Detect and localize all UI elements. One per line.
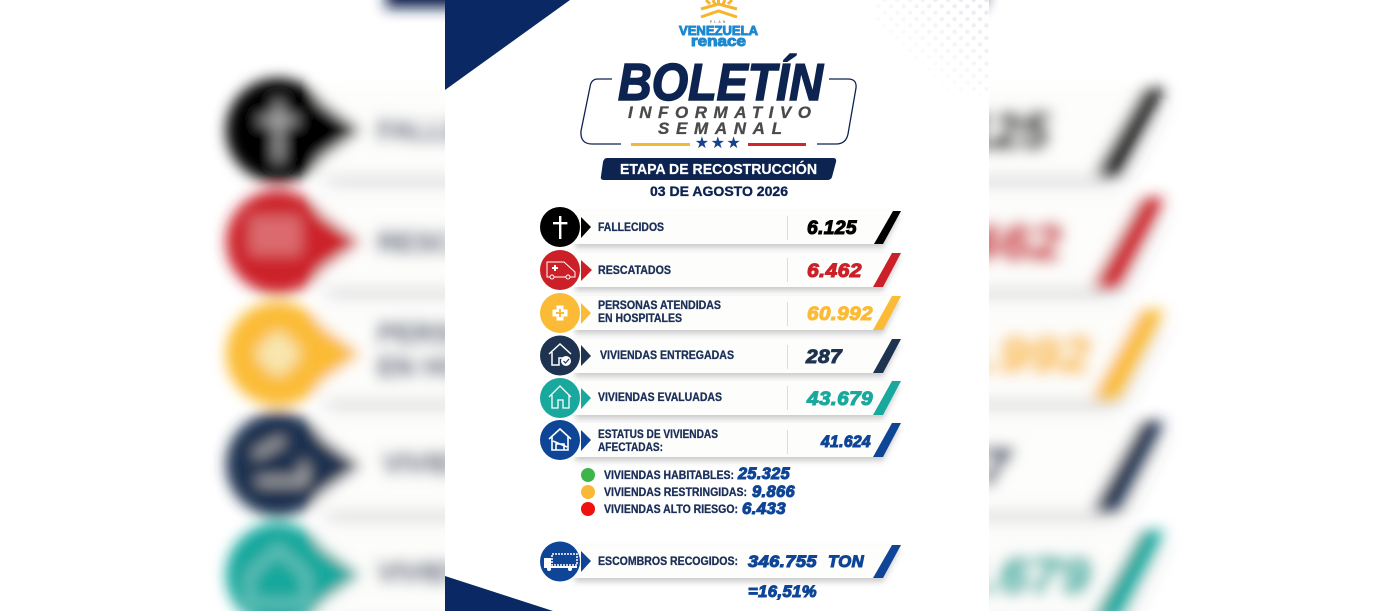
infographic canvas — [214, 0, 1174, 611]
row: Viviendas entregadas: 287 — [805, 346, 843, 368]
row: Viviendas evaluadas — [540, 378, 901, 418]
row: Viviendas evaluadas: VIVIENDAS EVALUADAS — [598, 392, 722, 404]
row: Rescatados — [540, 250, 901, 290]
blurred background copy of the bulletin: 43.679 — [919, 547, 1092, 604]
row: Fallecidos — [540, 207, 901, 247]
blurred background copy of the bulletin: RESCATADOS — [377, 226, 567, 259]
high risk: 6.433 — [742, 499, 786, 518]
legend: housing status — [581, 464, 795, 518]
blurred background copy of the bulletin: VIVIENDAS ENTREGADAS — [382, 447, 730, 480]
halftone dots top-right — [883, 0, 988, 82]
high risk: VIVIENDAS ALTO RIESGO: — [604, 504, 738, 516]
title block — [581, 54, 856, 152]
icon: medical cross — [540, 293, 591, 333]
habitable: VIVIENDAS HABITABLES: — [604, 470, 734, 482]
banner: Etapa de recostrucción — [601, 158, 836, 180]
red rule — [748, 143, 806, 146]
logo: Plan Venezuela Renace: VENEZUELA — [679, 23, 759, 38]
row: Personas atendidas: 60.992 — [807, 303, 873, 325]
row: Viviendas entregadas — [540, 336, 901, 376]
icon: house — [540, 378, 591, 418]
blurred background copy of the bulletin: 6.125 — [920, 102, 1050, 159]
habitable — [581, 464, 790, 483]
row: Escombros recogidos: 346.755 — [748, 552, 817, 571]
subheading: Semanal: SEMANAL — [658, 119, 782, 138]
yellow rule — [631, 143, 690, 146]
row: Estatus de viviendas afectadas: 41.624 — [820, 432, 871, 451]
row: Estatus de viviendas afectadas: AFECTADAS: — [598, 442, 663, 454]
logo: Plan Venezuela Renace: PLAN — [710, 20, 727, 24]
row: Escombros recogidos: TON — [828, 552, 864, 571]
central white poster panel — [445, 0, 989, 611]
logo: Plan Venezuela Renace — [679, 0, 759, 50]
blurred background copy of the bulletin: EN HOSPITALES — [377, 351, 595, 384]
heading: Boletín: BOLETÍN — [618, 54, 824, 112]
date: 03 DE AGOSTO 2026 — [650, 183, 788, 199]
icon: cross — [540, 207, 591, 247]
row: Estatus de viviendas afectadas: ESTATUS DE VIVIENDAS — [598, 429, 718, 441]
icon: damaged house — [540, 420, 591, 460]
row: Personas atendidas — [540, 293, 901, 333]
blurred background copy of the bulletin: PERSONAS ATENDIDAS — [377, 317, 697, 350]
row: Escombros recogidos — [540, 542, 901, 582]
stars: ★★★ — [695, 133, 742, 152]
restricted: VIVIENDAS RESTRINGIDAS: — [604, 487, 747, 499]
icon: house with check — [540, 336, 591, 376]
subheading: Informativo: INFORMATIVO — [628, 103, 811, 122]
icon: ambulance — [540, 250, 592, 290]
row: Rescatados: RESCATADOS — [598, 265, 671, 277]
row: Escombros recogidos: ESCOMBROS RECOGIDOS: — [598, 556, 738, 568]
blurred background copy of the bulletin: 6.462 — [920, 214, 1063, 271]
blurred background copy of the bulletin: FALLECIDOS — [377, 115, 548, 148]
navy corner top-left — [445, 0, 570, 90]
navy corner bottom-left — [445, 576, 553, 611]
icon: sun — [701, 0, 737, 17]
icon: truck — [540, 542, 591, 582]
row: Fallecidos: 6.125 — [807, 217, 858, 239]
row: Personas atendidas: PERSONAS ATENDIDAS — [598, 300, 721, 312]
banner: Etapa de recostrucción: ETAPA DE RECOSTRUCCIÓN — [620, 160, 817, 178]
row: Fallecidos: FALLECIDOS — [598, 222, 664, 234]
row: Estatus de viviendas afectadas — [540, 420, 901, 460]
blurred background copy of the bulletin: VIVIENDAS EVALUADAS — [377, 557, 699, 590]
logo: Plan Venezuela Renace: renace — [691, 34, 746, 50]
row: Viviendas evaluadas: 43.679 — [806, 388, 873, 410]
blurred background copy of the bulletin: 60.992 — [920, 326, 1092, 383]
high risk — [581, 499, 786, 518]
blurred background copy of the bulletin: 287 — [917, 438, 1013, 495]
restricted — [581, 482, 795, 501]
row: Viviendas entregadas: VIVIENDAS ENTREGADAS — [600, 350, 734, 362]
title frame — [581, 79, 856, 144]
habitable: 25.325 — [737, 464, 790, 483]
row: Personas atendidas: EN HOSPITALES — [598, 313, 682, 325]
percentage: =16,51% — [748, 582, 817, 601]
blurred background copy of the bulletin — [226, 0, 1165, 611]
restricted: 9.866 — [752, 482, 795, 501]
row: Rescatados: 6.462 — [807, 260, 862, 282]
